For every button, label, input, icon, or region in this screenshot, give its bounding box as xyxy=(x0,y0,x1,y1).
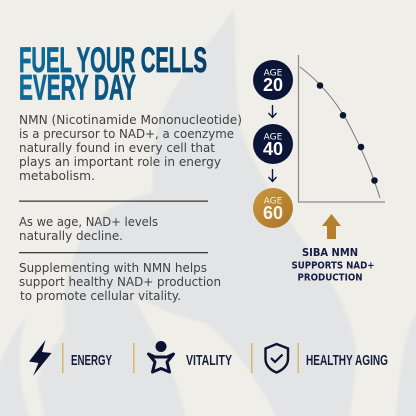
age 60 badge: AGE xyxy=(264,196,283,206)
text block: NMN definition: NMN (Nicotinamide Mononucleotide) xyxy=(19,113,242,127)
icon: lightning bolt xyxy=(29,340,52,376)
text block: NMN definition: metabolism. xyxy=(19,169,95,183)
text block: NMN definition: plays an important role in energy xyxy=(19,155,221,169)
icon: shield check xyxy=(266,344,288,372)
callout: SIBA NMN: PRODUCTION xyxy=(298,272,363,284)
icon: person xyxy=(148,341,174,372)
text block: supplementing xyxy=(19,261,221,303)
label: energy: ENERGY xyxy=(71,353,112,369)
age 40 badge xyxy=(253,124,293,164)
text block: NMN definition: is a precursor to NAD+, a coenzyme xyxy=(19,127,234,141)
age 60 badge xyxy=(253,188,293,228)
arrow: 40 to 60 xyxy=(268,169,276,182)
text block: NMN definition xyxy=(19,113,242,183)
text block: NAD decline xyxy=(19,215,158,243)
callout: SIBA NMN xyxy=(292,247,374,284)
text block: supplementing: support healthy NAD+ production xyxy=(19,275,221,289)
decline chart xyxy=(298,55,385,202)
text block: NMN definition: naturally found in every cell that xyxy=(19,141,215,155)
age 40 badge: AGE xyxy=(264,132,283,142)
text block: NAD decline: naturally decline. xyxy=(19,229,123,243)
label: vitality: VITALITY xyxy=(186,353,232,369)
text block: supplementing: to promote cellular vitality. xyxy=(20,289,181,303)
arrow: 20 to 40 xyxy=(268,105,276,118)
title xyxy=(19,41,207,108)
age 20 badge xyxy=(253,60,293,100)
text block: supplementing: Supplementing with NMN helps xyxy=(19,261,207,275)
arrow: up gold xyxy=(322,214,341,239)
callout: SIBA NMN: SUPPORTS NAD+ xyxy=(292,260,374,272)
text block: NAD decline: As we age, NAD+ levels xyxy=(19,215,158,229)
age 20 badge: 20 xyxy=(263,75,283,95)
title: FUEL YOUR CELLS xyxy=(19,41,207,80)
title: EVERY DAY xyxy=(19,68,136,108)
age 20 badge: AGE xyxy=(264,68,283,78)
age 40 badge: 40 xyxy=(263,139,283,159)
age 60 badge: 60 xyxy=(263,203,283,223)
callout: SIBA NMN: SIBA NMN xyxy=(302,247,358,259)
